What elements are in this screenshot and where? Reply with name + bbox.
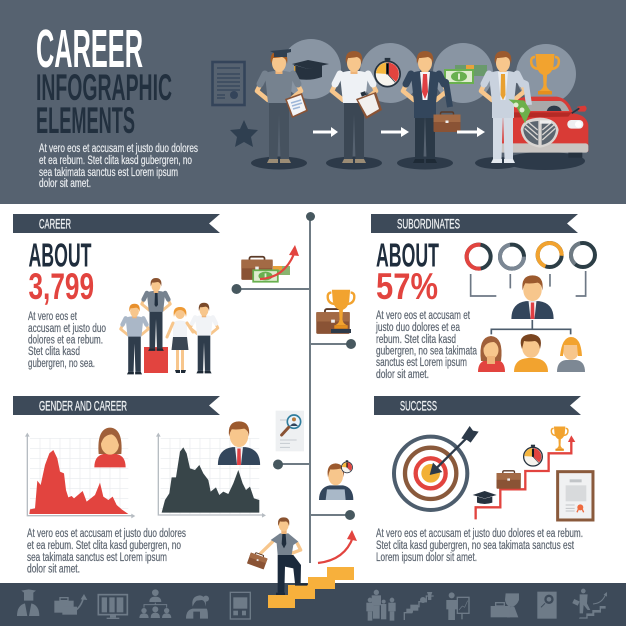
header panel — [0, 0, 626, 204]
icon: presenter — [446, 592, 469, 620]
subordinates text block: gubergren, no sea takimata — [376, 346, 477, 358]
ribbon: career: CAREER — [39, 216, 71, 232]
icon: money — [444, 65, 487, 84]
icon: person with stopwatch — [186, 595, 209, 619]
stat: about 3,799: ABOUT — [28, 236, 92, 274]
stat: about 57%: 57% — [376, 266, 438, 307]
title: INFOGRAPHIC — [36, 67, 172, 108]
org chart connectors — [471, 271, 586, 334]
icon: briefcase growth — [54, 594, 87, 615]
chart: men — [156, 433, 266, 518]
title: CAREER — [36, 19, 143, 79]
ribbon: success — [374, 396, 581, 415]
gender text block: dolor sit amet. — [27, 564, 80, 576]
ribbon: success: SUCCESS — [400, 398, 437, 414]
icon: certificate — [230, 592, 250, 619]
success text block: Lorem ipsum dolor sit amet. — [376, 552, 477, 564]
header text block: At vero eos et accusam et justo duo dolores — [39, 143, 198, 155]
icon: org chart — [139, 589, 171, 618]
icon: climbing briefcase — [247, 551, 268, 569]
header text block — [39, 143, 198, 190]
ribbon: career — [13, 214, 220, 233]
timeline — [232, 212, 356, 563]
gender text block: At vero eos et accusam et justo duo dolores — [27, 528, 186, 540]
avatar: man orange — [514, 334, 548, 372]
success text block — [376, 528, 583, 564]
icon: graduate — [17, 589, 39, 616]
career people group — [121, 278, 218, 374]
icon: resume search — [276, 411, 304, 451]
subordinates text block: rebum. Stet clita kasd — [376, 334, 456, 346]
framed certificate — [558, 472, 593, 520]
target — [394, 426, 479, 510]
gender text block — [27, 528, 186, 576]
icon: monitor — [98, 595, 127, 619]
growth arrow — [318, 530, 357, 563]
title — [36, 19, 172, 141]
gender text block: et ea rebum. Stet clita kasd gubergren, no — [27, 540, 181, 552]
boss avatar — [511, 275, 554, 319]
header text block: et ea rebum. Stet clita kasd gubergren, no — [39, 155, 192, 167]
icon: diploma outline — [212, 62, 244, 105]
icon: resume search — [537, 592, 557, 619]
icon: star — [230, 120, 258, 147]
figure: executive — [481, 51, 530, 163]
ground shadows — [251, 152, 585, 170]
career text block: accusam et justo duo — [28, 323, 106, 335]
woman figure — [167, 307, 193, 373]
subordinates text block — [375, 310, 477, 381]
subordinates text block: justo duo dolores et ea — [375, 322, 460, 334]
icon: briefcase — [434, 112, 460, 132]
stat: about 57%: ABOUT — [376, 236, 439, 274]
arrow in bullseye — [430, 426, 479, 475]
stat: about 3,799: 3,799 — [28, 266, 94, 307]
icon: trophy and briefcase — [316, 290, 354, 334]
career text block: At vero eos et — [28, 311, 78, 323]
avatar: man suit large — [218, 421, 260, 465]
career text block — [28, 311, 106, 370]
career text block: dolores et ea rebum. — [28, 334, 103, 346]
stat: about 57% — [376, 236, 439, 307]
footer band — [0, 583, 626, 626]
avatar: woman red — [478, 336, 505, 372]
icon: briefcase and cash growth — [241, 245, 299, 283]
icon: stopwatch — [375, 58, 400, 87]
icon: trophy and case — [491, 593, 519, 617]
stat: about 3,799 — [28, 236, 94, 307]
chart: women — [25, 433, 135, 518]
stairs — [268, 567, 354, 608]
subordinate avatars — [478, 334, 585, 372]
icon: person at laptop with stopwatch — [319, 460, 353, 500]
footer icon row left — [17, 589, 250, 619]
icon: team — [366, 590, 396, 621]
gender text block: sea takimata sanctus est Lorem ipsum — [27, 552, 167, 564]
subordinates text block: dolor sit amet. — [376, 369, 429, 381]
footer icon row right — [366, 589, 607, 621]
header text block: dolor sit amet. — [39, 178, 91, 190]
ribbon: gender and career — [13, 396, 220, 415]
ribbon: subordinates — [371, 214, 578, 233]
subordinates text block: At vero eos et accusam et — [376, 310, 471, 322]
stage circles — [281, 39, 576, 104]
step icons — [473, 427, 568, 504]
avatar: woman grey — [557, 337, 585, 372]
icon: climbing person — [572, 589, 607, 619]
header text block: sea takimata sanctus est Lorem ipsum — [39, 167, 178, 179]
icon: trophy — [531, 54, 559, 94]
figure: climbing man — [261, 517, 307, 595]
figure: office worker — [332, 51, 382, 163]
donut charts — [465, 238, 600, 272]
icon: graduation cap — [292, 60, 329, 80]
car — [500, 97, 588, 158]
career text block: gubergren, no sea. — [28, 358, 95, 370]
title: ELEMENTS — [36, 100, 135, 141]
career steps arrow — [476, 435, 575, 519]
icon: steps with trophy — [404, 592, 434, 620]
avatar: woman red large — [94, 428, 126, 467]
red podium — [144, 347, 168, 373]
figure: manager in suit — [403, 51, 450, 163]
career text block: Stet clita kasd — [28, 346, 80, 358]
figure: graduate — [257, 49, 308, 163]
subordinates text block: sanctus est Lorem ipsum — [376, 357, 467, 369]
arrows between stages — [313, 127, 485, 137]
ribbon: gender and career: GENDER AND CAREER — [39, 398, 127, 414]
ribbon: subordinates: SUBORDINATES — [397, 216, 460, 232]
